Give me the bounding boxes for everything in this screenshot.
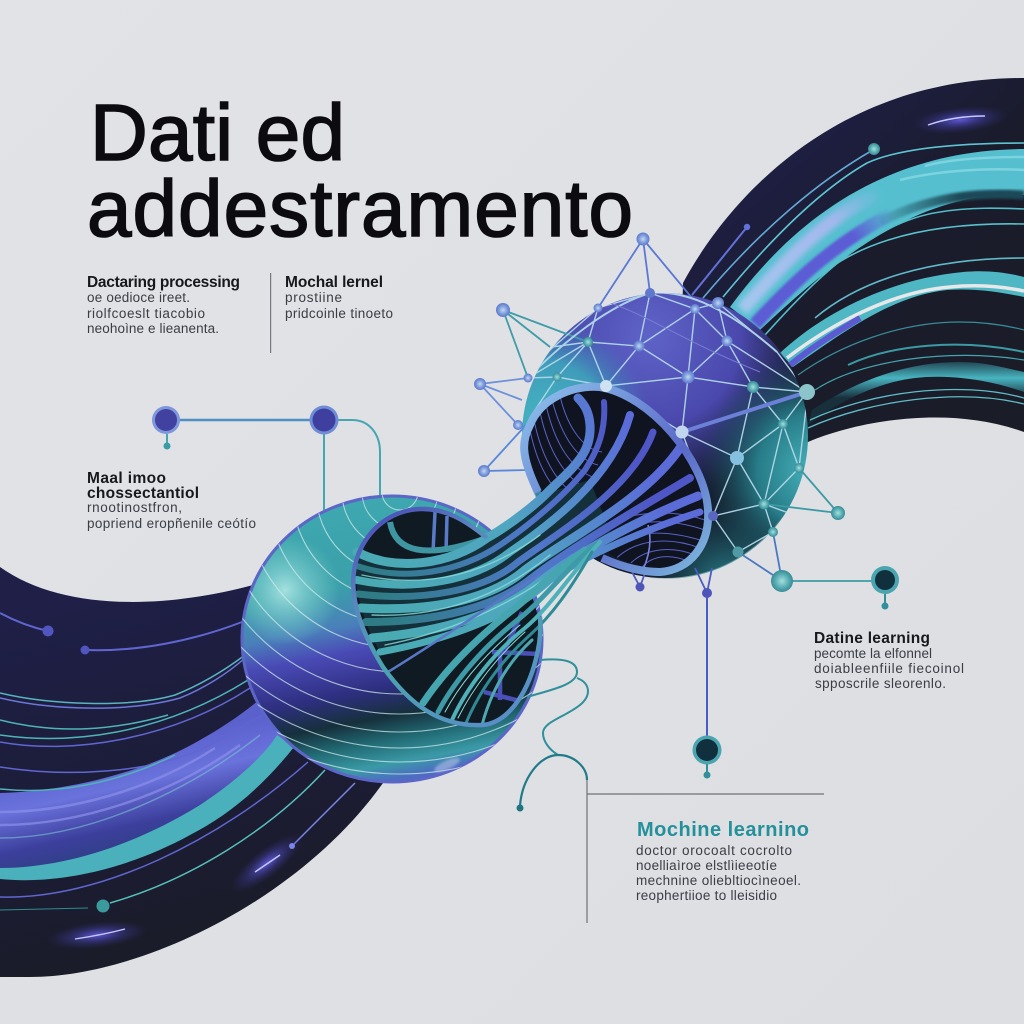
text block: Datine learning [814,630,964,691]
latitude lines [241,495,543,774]
inner struts [362,512,540,701]
text block: Maal imoo: popriend eropñenile ceótío [87,516,256,531]
node: middle [310,406,338,434]
network nodes [474,232,872,598]
swoosh: top right data stream [680,70,1024,450]
text block: Mochine learnino: doctor orocoalt cocrolto [636,843,792,858]
swoosh: bottom left data stream [0,560,400,980]
second band with white highlight [780,271,1024,367]
connector: right dark node [871,566,899,610]
connector: lower dark node [692,597,722,778]
main purple and teal band [0,695,296,880]
stream end nodes bottom left [42,626,295,912]
hole: right sphere opening [527,387,708,572]
thin stream lines [692,143,1024,428]
text block: Mochine learnino: Mochine learnino [637,819,809,841]
text block: Maal imoo: chossectantiol [87,485,199,502]
leader lines: machine learning callout [587,780,824,923]
text block: Mochal lernel: prostiine [285,290,342,305]
network outer struts [480,239,838,593]
text block: Datine learning: spposcrile sleorenlo. [815,676,946,691]
light glint [918,108,1003,132]
rim: right sphere opening [524,387,708,572]
text block: Mochine learnino: noelliaìroe elstlìieeotíe [636,858,777,873]
text block: Maal imoo: rnootinostfron, [87,500,182,515]
main teal and purple band [730,149,1024,330]
text block: Mochal lernel: Mochal lernel [285,274,383,291]
text block: Mochine learnino: reophertiioe to lleisidio [636,888,777,903]
text block: Mochine learnino: mechnine oliebltiocìneoel. [636,873,801,888]
text block: Mochal lernel: pridcoinle tinoeto [285,306,393,321]
rim: left sphere opening [353,509,540,725]
title: Dati ed [90,88,345,177]
soft teal band [808,362,1024,425]
vertical divider [270,273,271,353]
hole: left sphere opening [353,509,540,725]
text block: Dactaring processing: riolfcoeslt tiacobio [87,306,205,321]
text block: Dactaring processing: neohoìne e lieanenta. [87,321,219,336]
sphere: right network globe [480,239,838,593]
text block: Mochal lernel [285,274,393,321]
text block: Dactaring processing: Dactaring processing [87,274,240,291]
text block: Mochine learnino [636,819,809,903]
thin stream lines [0,613,355,910]
node: left [152,406,180,434]
upper ribbon strands [357,398,700,652]
ribbon tube joining both globes [356,398,700,725]
title [87,88,633,253]
light glints [52,836,299,948]
text block: Datine learning: doiableenfiile fiecoinol [814,661,964,676]
network mesh on surface [528,293,808,552]
connector: left purple nodes [152,406,380,510]
connector: lower squiggle cable [516,659,588,812]
text block: Datine learning: Datine learning [814,630,930,647]
text block: Dactaring processing: oe oedioce ireet. [87,290,190,305]
title: addestramento [87,164,633,253]
lower ribbon strands [388,542,600,725]
sphere: left ribbed globe [240,494,544,784]
text block: Datine learning: pecomte la elfonnel [814,646,932,661]
text block: Dactaring processing [87,274,240,336]
bottom highlight [432,755,462,775]
stream end nodes top right [744,143,880,230]
text block: Maal imoo: Maal imoo [87,470,166,487]
text block: Maal imoo [87,470,256,531]
